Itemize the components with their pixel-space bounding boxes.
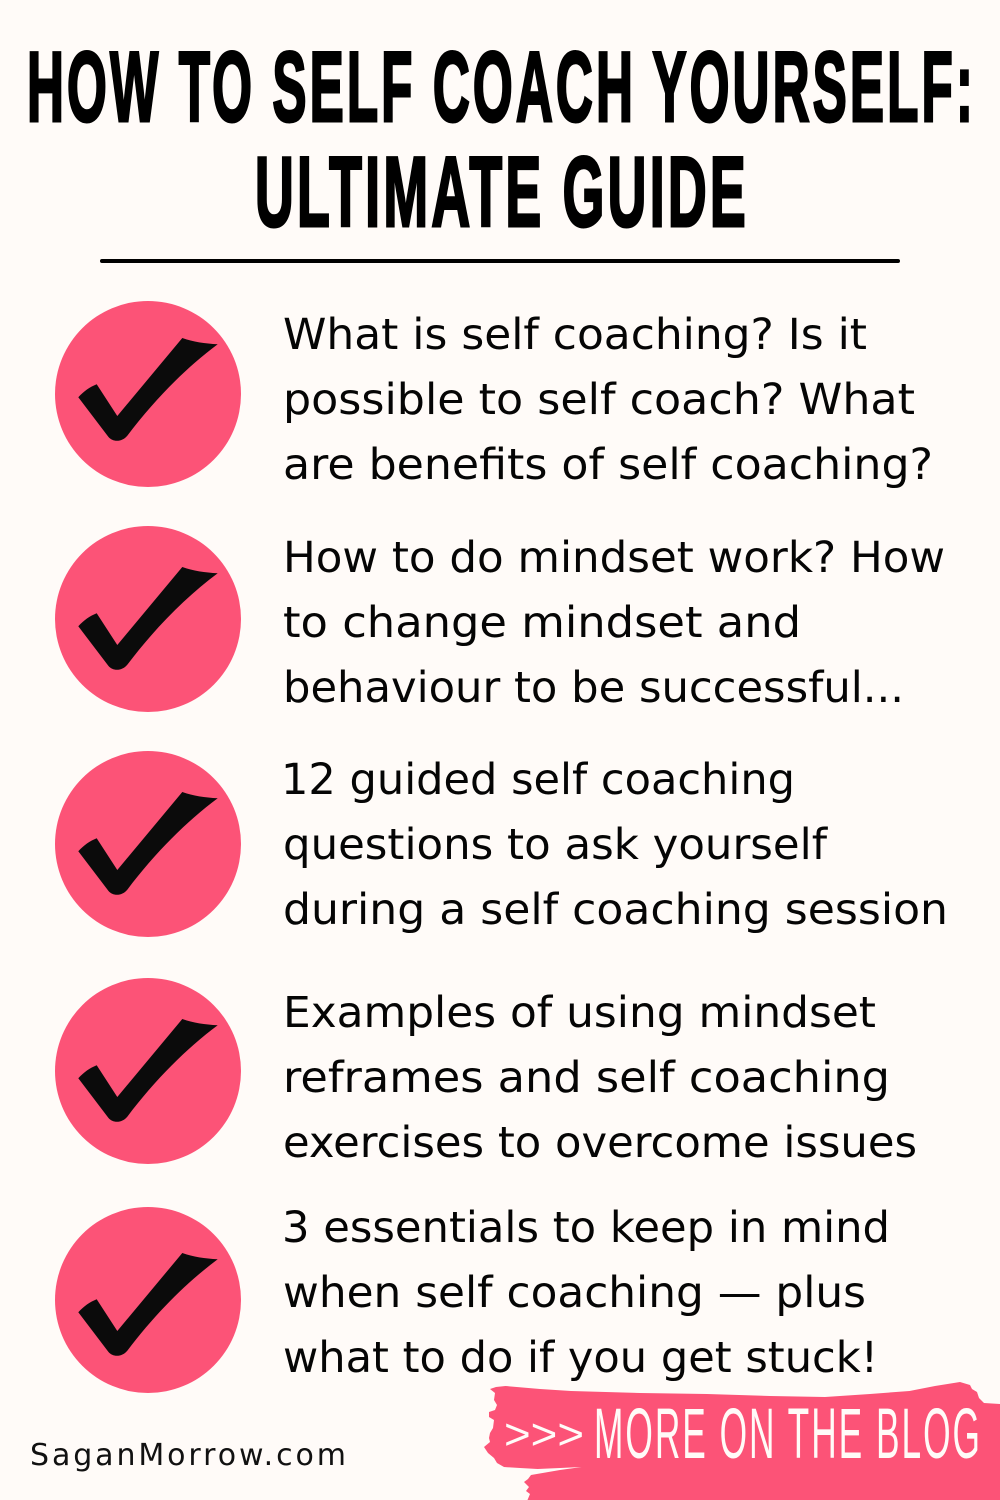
item 2 text: How to do mindset work? How [283, 533, 945, 583]
item 5 text: what to do if you get stuck! [283, 1333, 878, 1383]
item 2 text: to change mindset and [283, 598, 801, 648]
item 1 text: are benefits of self coaching? [283, 440, 933, 490]
title [27, 31, 976, 247]
item 3 text [281, 755, 948, 935]
item 1 text: possible to self coach? What [283, 375, 915, 425]
item 4 text: exercises to overcome issues [283, 1118, 917, 1168]
item 2 text: behaviour to be successful... [283, 663, 904, 713]
call to action banner [484, 1382, 1000, 1500]
item 3 text: during a self coaching session [283, 885, 948, 935]
item 4 check icon [55, 978, 241, 1164]
arrows: >>> [504, 1410, 584, 1459]
item 1 text [283, 310, 933, 490]
item 4 text [283, 988, 917, 1168]
item 5 text [282, 1203, 890, 1383]
item 4 text: Examples of using mindset [283, 988, 876, 1038]
item 5 text: when self coaching — plus [283, 1268, 866, 1318]
item 3 text: 12 guided self coaching [281, 755, 795, 805]
item 5 text: 3 essentials to keep in mind [282, 1203, 890, 1253]
item 4 text: reframes and self coaching [283, 1053, 890, 1103]
item 5 check icon [55, 1207, 241, 1393]
item 3 check icon [55, 751, 241, 937]
item 1 text: What is self coaching? Is it [283, 310, 867, 360]
item 1 check icon [55, 301, 241, 487]
item 3 text: questions to ask yourself [283, 820, 828, 870]
brush stroke background [484, 1382, 1000, 1500]
item 2 text [283, 533, 945, 713]
website footer: SaganMorrow.com [30, 1438, 346, 1473]
item 2 check icon [55, 526, 241, 712]
